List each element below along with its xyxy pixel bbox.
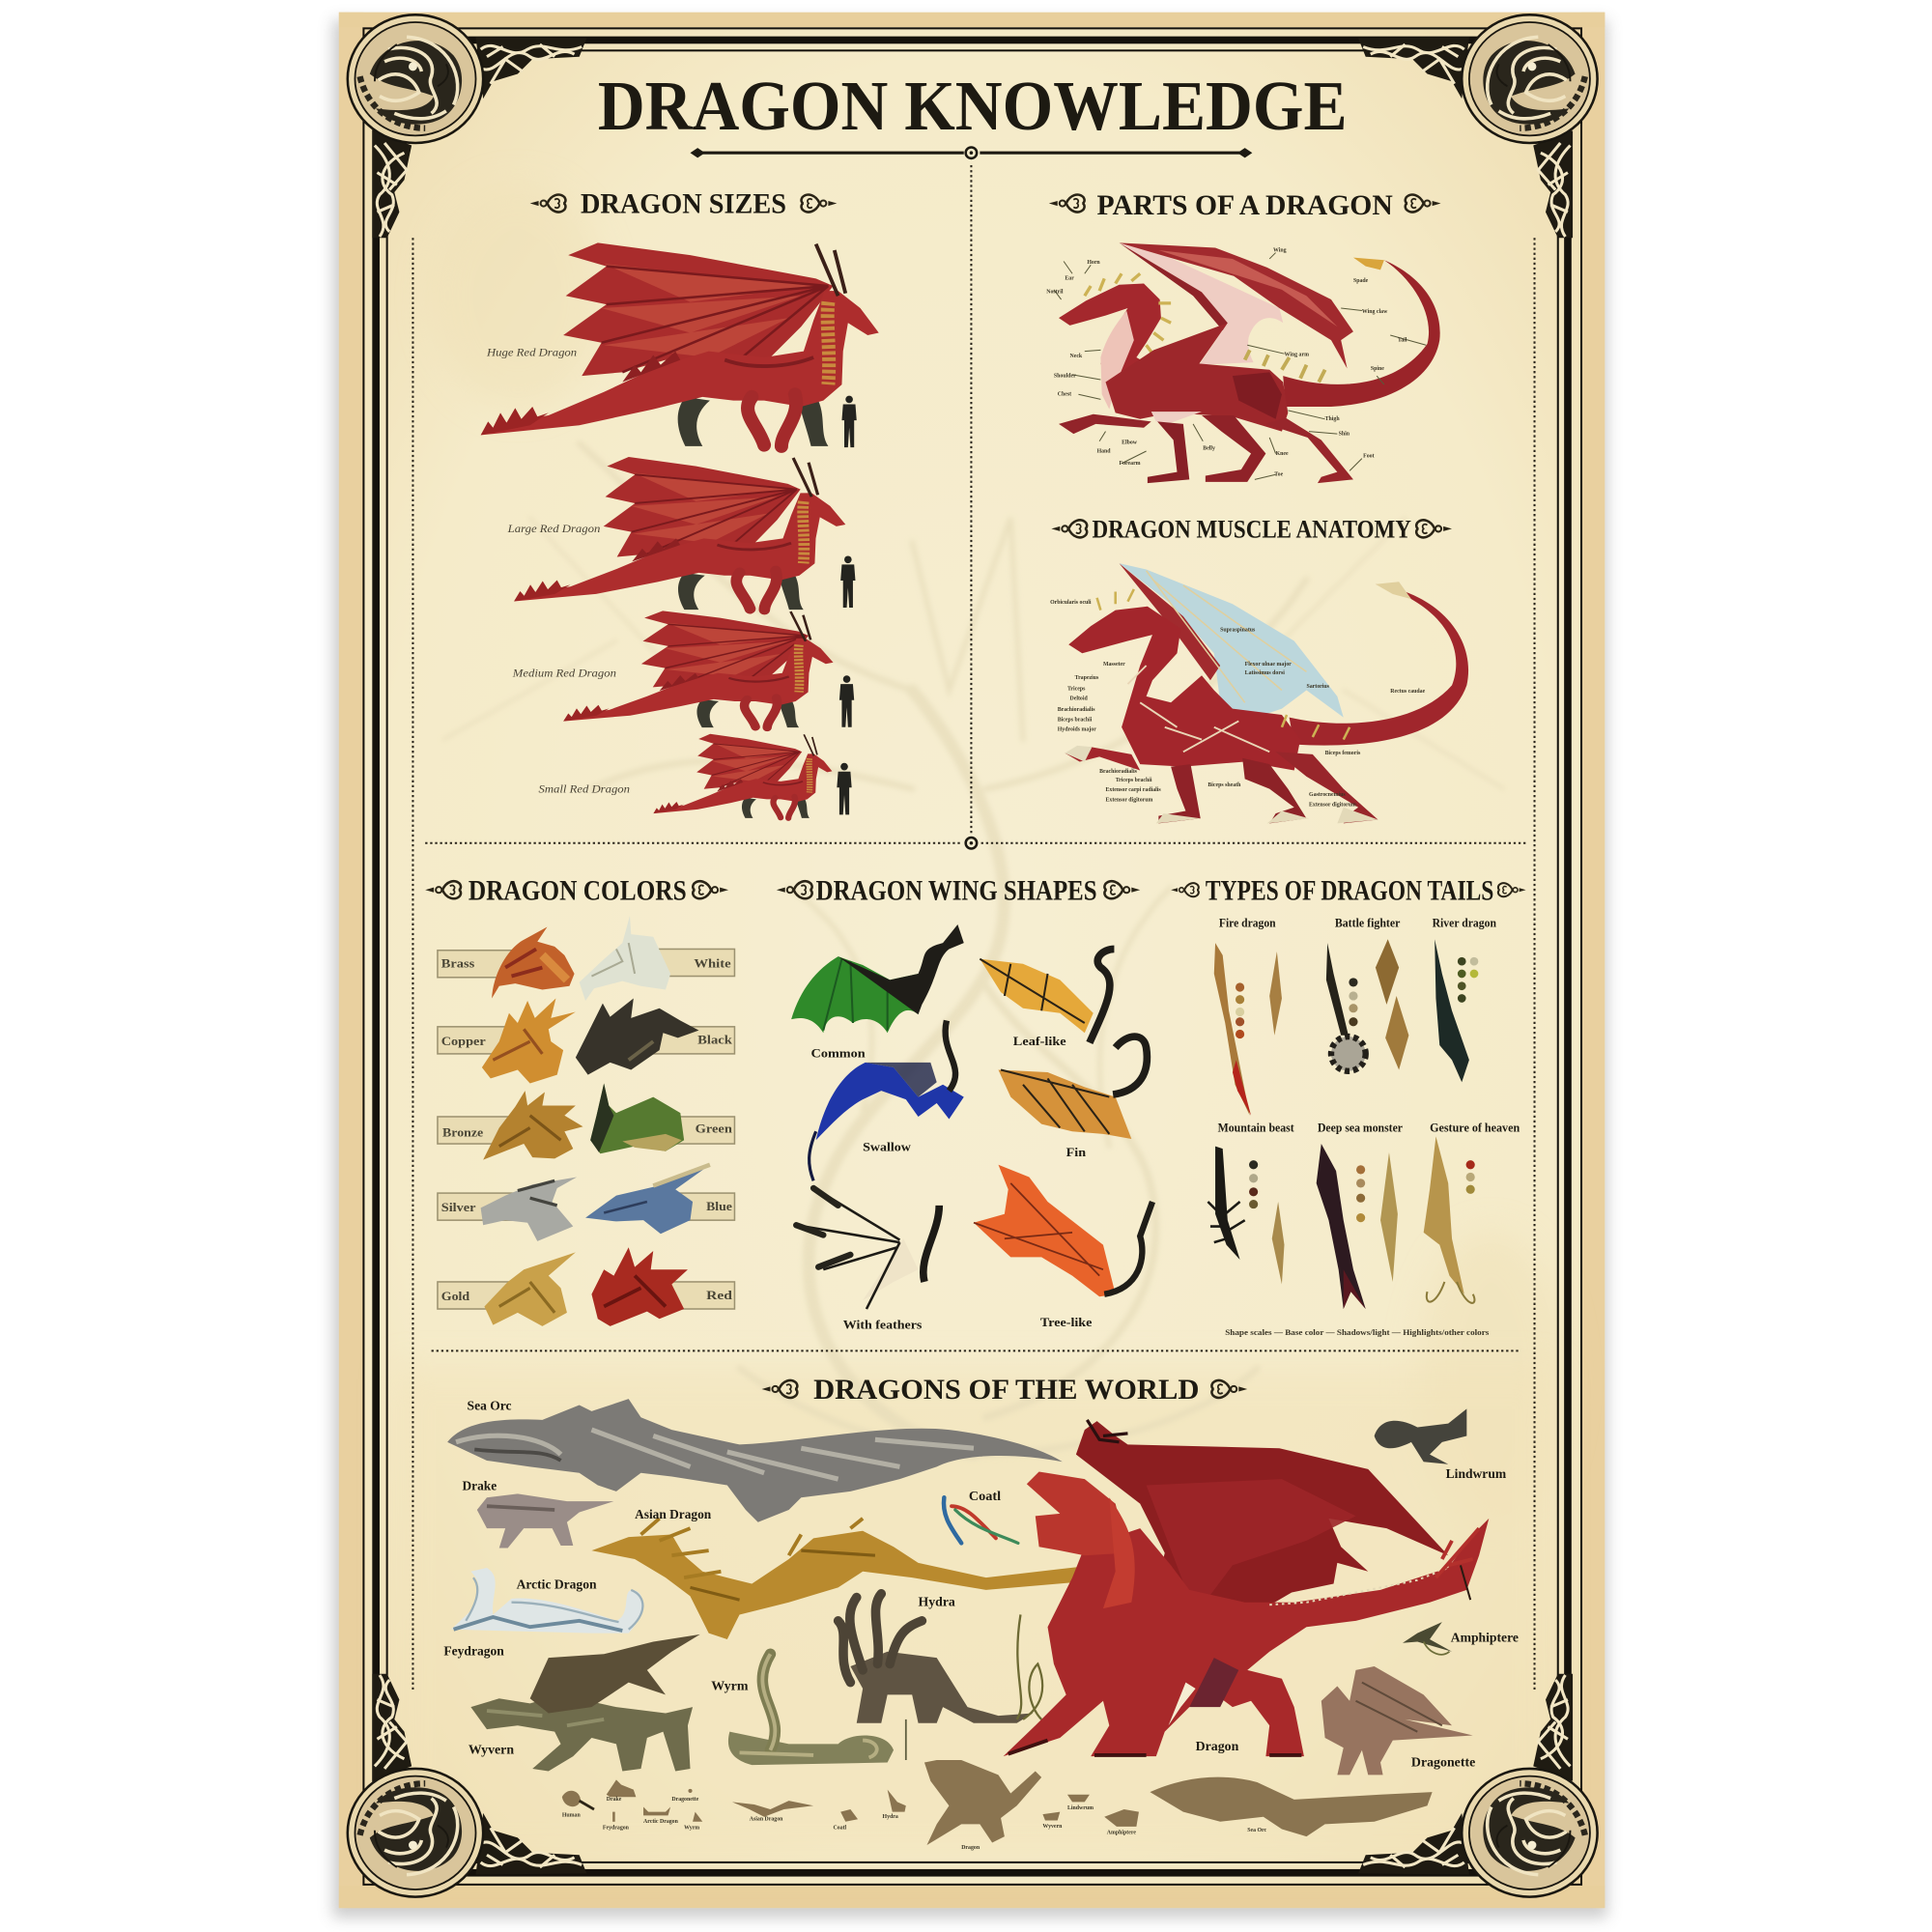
diagram: muscle dragon: Biceps femoris bbox=[1325, 751, 1361, 756]
size silhouette captions: Amphiptere bbox=[1107, 1831, 1136, 1836]
title: DRAGON KNOWLEDGE bbox=[598, 67, 1348, 145]
icon: green head bbox=[590, 1084, 684, 1153]
wing: fin: Fin bbox=[1066, 1146, 1086, 1159]
diagram: muscle dragon: Extensor carpi radialis bbox=[1105, 787, 1161, 793]
corner ornaments: remaining three bbox=[348, 14, 1598, 1897]
heading: tails: TYPES OF DRAGON TAILS bbox=[1206, 875, 1493, 906]
tail: mountain beast bbox=[1208, 1121, 1294, 1285]
tail legend caption: Shape scales — Base color — Shadows/light — Highlights/other colors bbox=[1225, 1328, 1489, 1337]
color names: Bronze bbox=[442, 1125, 484, 1139]
creature: wyrm bbox=[711, 1654, 906, 1765]
creature: arctic dragon bbox=[451, 1568, 642, 1634]
large red dragon bbox=[507, 457, 855, 610]
panel: parts of a dragon bbox=[1046, 190, 1441, 483]
tail: gesture of heaven bbox=[1424, 1121, 1520, 1303]
diagram: muscle dragon: Triceps brachii bbox=[1116, 778, 1152, 783]
tail: battle fighter bbox=[1326, 916, 1408, 1071]
diagram: dragon parts: Spine bbox=[1371, 366, 1384, 372]
poster background bbox=[332, 13, 1607, 1918]
diagram: muscle dragon: Biceps brachii bbox=[1058, 717, 1093, 723]
size silhouette captions: Wyrm bbox=[684, 1825, 699, 1831]
creature: main red dragon bbox=[1004, 1420, 1489, 1756]
color names: Blue bbox=[706, 1200, 733, 1213]
color names: Copper bbox=[441, 1035, 486, 1048]
icon: bronze head bbox=[483, 1091, 583, 1160]
creature: amphiptere: Amphiptere bbox=[1451, 1631, 1519, 1645]
diagram: dragon parts: Shoulder bbox=[1054, 373, 1076, 379]
size silhouette captions: Lindwrum bbox=[1067, 1805, 1094, 1811]
diagram: muscle dragon: Rectus caudae bbox=[1390, 689, 1426, 695]
heading: muscle anatomy: DRAGON MUSCLE ANATOMY bbox=[1092, 514, 1411, 543]
creature: drake: Drake bbox=[462, 1479, 497, 1493]
diagram: muscle dragon: Flexor ulnae major bbox=[1245, 662, 1292, 668]
medium red dragon: Medium Red Dragon bbox=[512, 668, 616, 679]
size silhouette captions: Asian Dragon bbox=[750, 1817, 783, 1823]
color names: Gold bbox=[441, 1290, 469, 1303]
creature: hydra bbox=[838, 1594, 1042, 1723]
diagram: dragon parts: Horn bbox=[1087, 260, 1100, 266]
diagram: dragon parts: Wing bbox=[1273, 247, 1287, 253]
tail: deep sea monster: Deep sea monster bbox=[1318, 1121, 1404, 1134]
icon: red head bbox=[591, 1247, 688, 1326]
diagram: dragon parts: Wing claw bbox=[1362, 309, 1388, 315]
diagram: dragon parts: Belly bbox=[1203, 446, 1215, 452]
size silhouette captions: Arctic Dragon bbox=[643, 1819, 679, 1825]
tail: fire dragon: Fire dragon bbox=[1219, 916, 1276, 929]
color names: Red bbox=[706, 1289, 732, 1302]
wing: fin bbox=[998, 1037, 1147, 1159]
creature: sea orc: Sea Orc bbox=[468, 1399, 512, 1413]
panel: dragon wing shapes bbox=[777, 875, 1152, 1331]
size silhouettes row bbox=[562, 1760, 1433, 1845]
diagram: dragon parts: Neck bbox=[1069, 354, 1083, 359]
creature: wyvern: Feydragon bbox=[443, 1644, 504, 1659]
tail: river dragon bbox=[1433, 916, 1496, 1082]
diagram: dragon parts: Elbow bbox=[1122, 440, 1138, 445]
diagram: muscle dragon: Masseter bbox=[1103, 662, 1125, 668]
wing: leaf-like: Leaf-like bbox=[1013, 1035, 1066, 1048]
wing: swallow: Swallow bbox=[863, 1141, 911, 1154]
tail: deep sea monster bbox=[1317, 1121, 1404, 1309]
panel: dragon sizes bbox=[481, 189, 879, 818]
heading: wing shapes: DRAGON WING SHAPES bbox=[816, 875, 1097, 906]
size silhouette captions: Hydra bbox=[883, 1814, 898, 1820]
icon: copper head bbox=[482, 998, 576, 1084]
heading: parts of a dragon: PARTS OF A DRAGON bbox=[1097, 190, 1393, 221]
small red dragon: Small Red Dragon bbox=[539, 783, 630, 795]
diagram: dragon parts: Forearm bbox=[1120, 461, 1141, 467]
tail: river dragon: River dragon bbox=[1433, 916, 1496, 929]
diagram: dragon parts: Chest bbox=[1058, 392, 1071, 398]
diagram: dragon parts: Tail bbox=[1398, 337, 1407, 343]
diagram: dragon parts: Foot bbox=[1363, 453, 1375, 459]
corner knotwork: top left bbox=[372, 37, 586, 238]
large red dragon: Large Red Dragon bbox=[507, 524, 601, 535]
tail: fire dragon bbox=[1214, 916, 1282, 1116]
creature: drake bbox=[462, 1479, 613, 1548]
panel: dragon colors bbox=[425, 875, 734, 1326]
wing: tree-like: Tree-like bbox=[1040, 1316, 1093, 1329]
size silhouette captions bbox=[562, 1797, 1267, 1851]
wing: tree-like bbox=[974, 1165, 1152, 1329]
color names: White bbox=[694, 957, 731, 971]
creature: dragonette: Dragonette bbox=[1411, 1754, 1475, 1769]
size silhouette captions: Drake bbox=[607, 1797, 622, 1803]
diagram: dragon parts: Knee bbox=[1276, 451, 1289, 457]
dotted dividers bbox=[412, 165, 1535, 1691]
diagram: muscle dragon: Orbicularis oculi bbox=[1050, 600, 1092, 606]
creature: dragonette bbox=[1321, 1666, 1475, 1775]
creature: asian dragon bbox=[591, 1507, 1116, 1639]
color names: Silver bbox=[441, 1201, 476, 1214]
creature: wyvern bbox=[443, 1634, 700, 1771]
icon: brass head bbox=[492, 926, 575, 998]
panel: types of dragon tails bbox=[1171, 875, 1526, 1337]
huge red dragon: Huge Red Dragon bbox=[486, 348, 577, 359]
color names: Green bbox=[696, 1122, 732, 1136]
creature: hydra: Hydra bbox=[919, 1595, 955, 1609]
diagram: muscle dragon: Trapezius bbox=[1075, 675, 1099, 681]
creature: wyvern: Wyvern bbox=[469, 1743, 515, 1757]
creature: coatl: Coatl bbox=[969, 1489, 1001, 1503]
faint dragon watermark bbox=[443, 443, 1504, 1455]
wing: common: Common bbox=[811, 1047, 866, 1061]
size silhouette captions: Dragonette bbox=[671, 1797, 699, 1803]
wing: with feathers bbox=[796, 1188, 939, 1331]
tail: mountain beast: Mountain beast bbox=[1218, 1121, 1294, 1134]
diagram: muscle dragon: Gastrocnemius bbox=[1309, 792, 1346, 798]
diagram: muscle dragon: Hydroids major bbox=[1058, 727, 1096, 733]
creature: lindwurm: Lindwrum bbox=[1446, 1466, 1506, 1481]
small red dragon bbox=[539, 734, 852, 818]
creature: coatl bbox=[944, 1489, 1018, 1543]
icon: gold head bbox=[484, 1252, 576, 1326]
panel: dragon muscle anatomy bbox=[1050, 514, 1468, 823]
creature: arctic dragon: Arctic Dragon bbox=[517, 1577, 597, 1592]
title rule bbox=[691, 147, 1252, 158]
diagram: muscle dragon: Triceps bbox=[1067, 687, 1086, 693]
diagram: dragon parts: Hand bbox=[1097, 448, 1111, 454]
diagram: muscle dragon: Latissimus dorsi bbox=[1245, 670, 1285, 676]
tail: gesture of heaven: Gesture of heaven bbox=[1430, 1121, 1520, 1134]
size silhouette captions: Dragon bbox=[961, 1845, 980, 1851]
size silhouette captions: Human bbox=[562, 1813, 581, 1819]
wing: swallow bbox=[810, 1020, 964, 1180]
wing: common bbox=[791, 924, 964, 1061]
diagram: dragon parts: Wing arm bbox=[1285, 353, 1309, 358]
color names: Black bbox=[697, 1034, 732, 1047]
diagram: muscle dragon: Deltoid bbox=[1069, 696, 1088, 702]
wing: leaf-like bbox=[980, 949, 1114, 1048]
huge red dragon bbox=[481, 242, 879, 447]
diagram: dragon parts: Ear bbox=[1065, 276, 1074, 282]
creature: sea orc bbox=[447, 1399, 1063, 1522]
diagram: muscle dragon: Extensor digitorum bbox=[1105, 797, 1153, 803]
size silhouette captions: Feydragon bbox=[603, 1825, 630, 1831]
heading: dragon sizes bbox=[530, 189, 837, 220]
icon: white head bbox=[580, 916, 670, 1001]
tail: battle fighter: Battle fighter bbox=[1335, 916, 1401, 929]
wing: with feathers: With feathers bbox=[843, 1318, 923, 1331]
diagram: muscle dragon bbox=[1050, 563, 1468, 823]
color names bbox=[441, 957, 733, 1303]
heading: dragon sizes: DRAGON SIZES bbox=[581, 189, 786, 220]
diagram: dragon parts: Spade bbox=[1353, 278, 1369, 284]
creature: main red dragon: Dragon bbox=[1196, 1739, 1239, 1753]
size silhouette captions: Wyvern bbox=[1042, 1824, 1063, 1830]
diagram: muscle dragon: Sartorius bbox=[1306, 684, 1330, 690]
diagram: dragon parts: Thigh bbox=[1325, 416, 1340, 422]
heading: dragon colors: DRAGON COLORS bbox=[469, 875, 687, 906]
corner ornament: top left bbox=[348, 14, 483, 143]
panel: dragons of the world bbox=[443, 1375, 1519, 1851]
creature: lindwurm bbox=[1375, 1408, 1506, 1481]
diagram: muscle dragon: Extensor digitorum bbox=[1309, 802, 1356, 808]
divider medallion bbox=[966, 838, 977, 848]
name plaques bbox=[438, 949, 734, 1309]
diagram: muscle dragon: Biceps sheath bbox=[1208, 782, 1241, 788]
diagram: dragon parts bbox=[1046, 242, 1440, 483]
diagram: dragon parts: Toe bbox=[1274, 472, 1284, 478]
creature: wyrm: Wyrm bbox=[711, 1678, 748, 1692]
diagram: muscle dragon: Brachioradialis bbox=[1058, 707, 1095, 713]
diagram: muscle dragon: Supraspinatus bbox=[1220, 627, 1256, 633]
color names: Brass bbox=[441, 957, 475, 971]
size silhouette captions: Sea Orc bbox=[1247, 1828, 1267, 1833]
creature: asian dragon: Asian Dragon bbox=[635, 1507, 712, 1521]
diagram: dragon parts: Nostril bbox=[1046, 290, 1064, 296]
size silhouette captions: Coatl bbox=[834, 1825, 847, 1831]
frame border lines bbox=[363, 28, 1581, 1885]
creature: amphiptere bbox=[1403, 1622, 1519, 1655]
medium red dragon bbox=[512, 611, 854, 727]
icon: blue head bbox=[585, 1165, 710, 1234]
icon: silver head bbox=[481, 1178, 577, 1241]
diagram: dragon parts: Shin bbox=[1339, 431, 1350, 437]
heading: world: DRAGONS OF THE WORLD bbox=[813, 1375, 1199, 1406]
diagram: muscle dragon: Brachioradialis bbox=[1099, 769, 1138, 775]
icon: black head bbox=[576, 998, 698, 1075]
